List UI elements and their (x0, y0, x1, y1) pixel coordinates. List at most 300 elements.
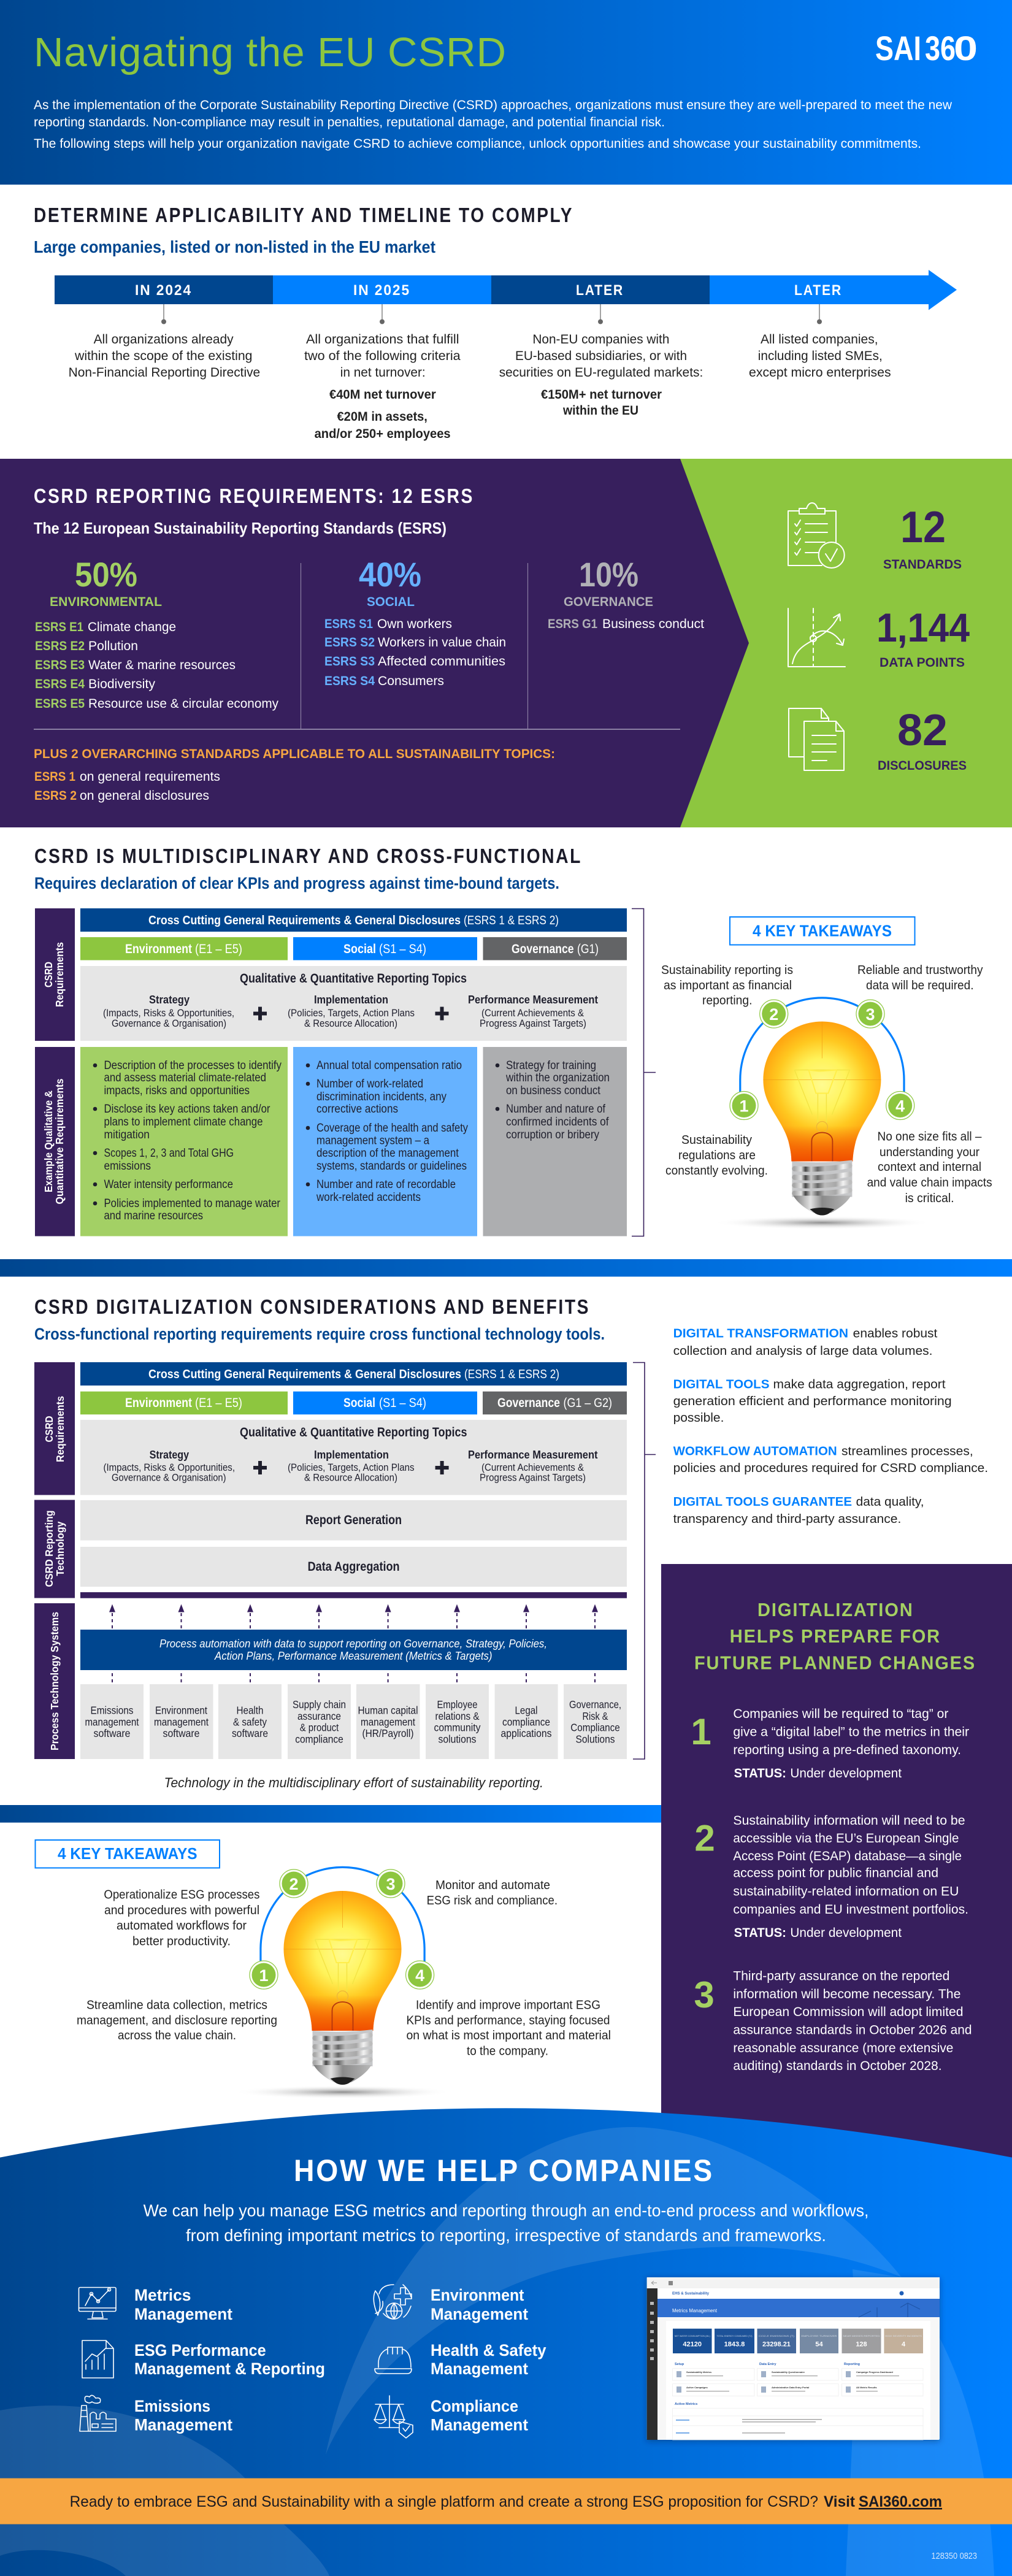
column: social (324, 555, 506, 688)
call to action banner: SAI360.com (859, 2493, 942, 2510)
screenshot card titles: Campaign Progress Dashboard (856, 2371, 893, 2374)
panel: CSRD reporting requirements (0, 459, 1012, 827)
panel: social examples: systems, standards or guidelines (316, 1160, 467, 1173)
tile: emissions software (80, 1684, 144, 1759)
KPI tile headers: HIGH SEVERITY INCIDENTS (885, 2334, 922, 2337)
icon: clipboard checklist (788, 503, 845, 568)
tile: environment software: software (163, 1727, 200, 1739)
panel: governance examples (483, 1047, 627, 1236)
change 3: Third-party assurance on the reported (733, 1969, 949, 1984)
text: digital benefits: data quality, (856, 1495, 924, 1509)
KPI tiles (673, 2329, 923, 2353)
sidebar label: process technology systems (34, 1603, 75, 1759)
column: governance: Business conduct (602, 617, 704, 631)
item: health and safety: Health & Safety (431, 2341, 546, 2359)
change 3 (694, 1969, 972, 2073)
reporting topics panel: & Resource Allocation) (304, 1018, 397, 1029)
column: social: Own workers (377, 617, 452, 631)
reporting topics panel: Qualitative & Quantitative Reporting Topics (240, 1425, 467, 1439)
number 1 (250, 1961, 278, 1989)
dividers (34, 563, 680, 729)
screenshot cards (673, 2369, 923, 2440)
column: environmental: 50% (75, 555, 137, 594)
reporting topics panel: Governance & Organisation) (112, 1018, 226, 1029)
pillar: governance: Governance (497, 1396, 560, 1410)
change 2: companies and EU investment portfolios. (733, 1903, 968, 1917)
stat: 12 standards (883, 503, 962, 572)
column: environmental: Water & marine resources (88, 658, 236, 672)
sidebar label: example requirements (35, 1047, 75, 1236)
change 2: Access Point (ESAP) database—a single (733, 1849, 962, 1863)
overarching standards: on general requirements (80, 770, 220, 784)
sidebar label: CSRD requirements (35, 908, 75, 1041)
tile: legal compliance: applications (500, 1727, 552, 1739)
panel: social examples: corrective actions (316, 1103, 398, 1116)
takeaway 3 text (427, 1879, 558, 1907)
timeline text: in 2024: within the scope of the existing (74, 349, 252, 363)
reporting topics panel: Progress Against Targets) (480, 1018, 586, 1029)
section: key takeaways two (36, 1840, 611, 2099)
tile: human capital: Human capital (358, 1704, 418, 1716)
item: compliance management: Compliance (431, 2397, 518, 2415)
reporting topics panel: (Policies, Targets, Action Plans (288, 1007, 415, 1019)
panel: social examples: management system – a (316, 1135, 429, 1147)
text: digital benefits: WORKFLOW AUTOMATION (673, 1445, 837, 1459)
panel: environment examples: Water intensity performance (104, 1178, 233, 1191)
pillar: social (293, 1392, 477, 1414)
reporting topics panel: Strategy (150, 1449, 189, 1461)
key takeaways box (36, 1840, 220, 1868)
process automation bar (80, 1630, 627, 1670)
KPI tile headers: TOTAL ENERGY CONSUMED (TJ) (716, 2334, 753, 2337)
text: digital benefits: DIGITAL TOOLS GUARANTEE (673, 1495, 852, 1509)
item: compliance management: Management (431, 2415, 528, 2434)
panel: environment examples: impacts, risks and opportunities (104, 1084, 250, 1097)
reporting topics panel: Implementation (314, 1449, 389, 1461)
item: environment management (431, 2286, 528, 2323)
subheading: The 12 European Sustainability Reporting Standards (ESRS) (34, 519, 447, 537)
takeaway 4 text: is critical. (905, 1192, 954, 1205)
tile: health and safety software (218, 1684, 282, 1759)
reporting topics panel: Implementation (314, 994, 388, 1006)
reporting topics panel: Governance & Organisation) (112, 1472, 226, 1483)
text: digital benefits: policies and procedures required for CSRD compliance. (673, 1462, 988, 1475)
panel: social examples (293, 1047, 477, 1236)
logo: SAI360: 36 (925, 29, 956, 67)
takeaway 3 text: ESG risk and compliance. (427, 1894, 558, 1907)
KPI tiles: 4 (902, 2341, 906, 2348)
change 1: give a “digital label” to the metrics in their (733, 1725, 969, 1739)
change 3: assurance standards in October 2026 and (733, 2023, 972, 2037)
intro paragraphs: reporting standards. Non-compliance may result in penalties, reputational damage, and potential financial risk. (34, 115, 665, 129)
number 1 (730, 1092, 758, 1120)
change 1: 1 (691, 1711, 711, 1752)
bracket (632, 909, 656, 1236)
change 2: STATUS: (734, 1926, 786, 1940)
reporting topics panel: Progress Against Targets) (480, 1472, 586, 1483)
intro paragraphs (34, 98, 953, 151)
KPI tiles: 54 (815, 2341, 823, 2348)
stat: 1,144 data points: DATA POINTS (880, 656, 965, 670)
timeline text: later non-EU (499, 332, 703, 418)
takeaway 2 text: Operationalize ESG processes (104, 1888, 259, 1902)
call to action banner (0, 2478, 1012, 2524)
sidebar label: CSRD requirements (34, 1362, 75, 1495)
KPI tiles: 1843.8 (724, 2341, 745, 2348)
tile: emissions software: software (93, 1727, 130, 1739)
panel: environment examples: Scopes 1, 2, 3 and Total GHG (104, 1147, 234, 1160)
screenshot card titles: Sustainability Questionnaire (772, 2371, 805, 2374)
arrows up from process systems (109, 1604, 598, 1684)
number 3: 3 (386, 1875, 396, 1893)
sidebar label: CSRD requirements: Requirements (54, 1396, 66, 1462)
change 2: Under development (790, 1926, 902, 1940)
text: digital benefits: make data aggregation, report (773, 1378, 946, 1392)
panel heading: FUTURE PLANNED CHANGES (694, 1652, 976, 1674)
number 1: 1 (259, 1966, 269, 1985)
change 2: sustainability-related information on EU (733, 1885, 959, 1899)
sidebar label: CSRD requirements: CSRD (43, 1416, 55, 1443)
text: digital benefits: possible. (673, 1411, 724, 1425)
panel: environment examples: mitigation (104, 1129, 150, 1141)
pillar: environment (80, 937, 288, 960)
column: environmental: ENVIRONMENTAL (50, 595, 162, 609)
takeaway 1 text (665, 1133, 768, 1178)
panel: environment examples: and assess material climate-related (104, 1071, 266, 1084)
heading: CSRD DIGITALIZATION CONSIDERATIONS AND BENEFITS (34, 1295, 590, 1318)
screenshot card titles: All Metric Results (856, 2386, 877, 2389)
overarching standards: ESRS 1 (34, 770, 75, 784)
panel: social examples: Annual total compensation ratio (316, 1059, 462, 1072)
column: governance (548, 555, 704, 631)
column: governance: 10% (579, 555, 638, 594)
takeaway 4 text: understanding your (880, 1146, 979, 1159)
takeaway 4 text: No one size fits all – (877, 1130, 982, 1143)
reporting topics panel (80, 1420, 627, 1495)
timeline text: later listed (749, 332, 891, 380)
timeline text: in 2025: two of the following criteria (304, 349, 461, 363)
tile: human capital: (HR/Payroll) (362, 1727, 413, 1739)
overarching standards: PLUS 2 OVERARCHING STANDARDS APPLICABLE TO ALL SUSTAINABILITY TOPICS: (34, 747, 555, 761)
intro text: from defining important metrics to reporting, irrespective of standards and frameworks. (186, 2226, 826, 2245)
icon: safety helmet (375, 2347, 412, 2374)
tile: legal compliance (495, 1684, 558, 1759)
column: social: ESRS S1 (324, 617, 373, 631)
panel: governance examples: Number and nature of (506, 1103, 606, 1116)
change 1: Companies will be required to “tag” or (733, 1707, 948, 1721)
dashboard screenshot (647, 2277, 940, 2440)
intro text (144, 2201, 868, 2245)
number 2: 2 (289, 1875, 299, 1893)
timeline arrow: IN 2025 (353, 282, 410, 299)
timeline text: in 2024 (69, 332, 260, 380)
takeaway 4 text: on what is most important and material (406, 2029, 611, 2042)
tile: employee relations: relations & (435, 1710, 480, 1722)
overarching standards: on general disclosures (80, 789, 209, 803)
column: environmental: Pollution (88, 639, 138, 653)
tile: health and safety software: & safety (233, 1716, 267, 1728)
tile: employee relations: community (434, 1722, 481, 1734)
column: governance: GOVERNANCE (564, 595, 653, 609)
takeaway 1 text (77, 1998, 277, 2042)
timeline text: in 2025: in net turnover: (340, 366, 426, 380)
pillar: social: Social (343, 942, 376, 956)
panel: governance examples: confirmed incidents of (506, 1116, 609, 1129)
timeline arrow: LATER (794, 282, 842, 299)
sidebar label: reporting technology: CSRD Reporting (43, 1510, 55, 1587)
takeaway 2 text: better productivity. (132, 1934, 231, 1948)
key takeaways box: 4 KEY TAKEAWAYS (58, 1844, 197, 1863)
intro paragraphs: As the implementation of the Corporate Sustainability Reporting Directive (CSRD) approaches, organizations must ensure they are well-prepared to meet the new (34, 98, 953, 112)
change 3: reasonable assurance (more extensive (733, 2041, 953, 2055)
timeline text: later listed: except micro enterprises (749, 366, 891, 380)
takeaway 4 text: and value chain impacts (867, 1176, 992, 1190)
cross cutting bar: Cross Cutting General Requirements & General Disclosures (148, 1368, 461, 1381)
column: environmental: ESRS E5 (35, 697, 85, 711)
item: environment management: Management (431, 2305, 528, 2323)
dashboard screenshot: Metrics Management (672, 2307, 718, 2313)
stat: 82 disclosures (878, 706, 967, 773)
takeaway 2 text (104, 1888, 259, 1948)
tile: environment software: Environment (155, 1704, 207, 1716)
logo: SAI360: SAI (875, 29, 921, 67)
title: Navigating the EU CSRD (34, 29, 507, 75)
panel: social examples: work-related accidents (316, 1191, 421, 1204)
icon: environment globe (374, 2285, 412, 2319)
item: health and safety: Management (431, 2359, 528, 2378)
tile: supply chain: assurance (297, 1710, 341, 1722)
overarching standards: ESRS 2 (34, 789, 77, 803)
item: emissions management (134, 2397, 232, 2434)
icon: metrics monitor (79, 2288, 116, 2319)
heading: CSRD IS MULTIDISCIPLINARY AND CROSS-FUNCTIONAL (34, 845, 582, 867)
takeaway 2 text: automated workflows for (117, 1919, 247, 1933)
screenshot card titles: Sustainability Metrics (686, 2371, 712, 2374)
KPI tiles: 23298.21 (762, 2341, 791, 2348)
heading: DETERMINE APPLICABILITY AND TIMELINE TO COMPLY (34, 204, 573, 226)
panel: social examples: Number and rate of recordable (316, 1178, 456, 1191)
timeline text: later listed: including listed SMEs, (758, 349, 883, 363)
number 1: 1 (739, 1097, 749, 1115)
icon: performance document (82, 2340, 113, 2378)
divider band (0, 1259, 1012, 1277)
number 4 (886, 1092, 914, 1120)
change 2: access point for public financial and (733, 1866, 938, 1880)
change 3: 3 (694, 1974, 715, 2015)
number 3 (856, 1000, 884, 1028)
stat: 82 disclosures: DISCLOSURES (878, 759, 967, 773)
column: environmental: ESRS E2 (35, 639, 85, 653)
subheading: Large companies, listed or non-listed in the EU market (34, 237, 435, 256)
process automation bar: Process automation with data to support reporting on Governance, Strategy, Policies, (159, 1638, 547, 1650)
item: emissions management: Management (134, 2415, 232, 2434)
tile: human capital (356, 1684, 420, 1759)
document code: 128350 0823 (931, 2551, 977, 2561)
KPI tile headers: NET WATER CONSUMPTION (ML) (675, 2334, 710, 2337)
call to action banner: Ready to embrace ESG and Sustainability with a single platform and create a strong ESG proposition for CSRD? (70, 2493, 818, 2510)
cross cutting bar (80, 1362, 627, 1386)
icon: factory emissions (80, 2395, 116, 2431)
takeaway 1 text: Streamline data collection, metrics (86, 1998, 267, 2012)
timeline text: later non-EU: within the EU (562, 404, 638, 418)
tile: employee relations (426, 1684, 489, 1759)
tile: legal compliance: compliance (502, 1716, 550, 1728)
panel: social examples: description of the management (316, 1147, 459, 1160)
tile: human capital: management (361, 1716, 415, 1728)
reporting topics panel: & Resource Allocation) (304, 1472, 397, 1483)
panel: data aggregation (80, 1547, 627, 1587)
text: digital benefits: enables robust (853, 1327, 938, 1341)
change 2: Sustainability information will need to be (733, 1814, 965, 1828)
change 3: auditing) standards in October 2028. (733, 2059, 942, 2073)
change 1 (691, 1707, 969, 1781)
pillar: governance (483, 937, 627, 960)
item: ESG performance: Management & Reporting (134, 2359, 325, 2378)
reporting topics panel: (Impacts, Risks & Opportunities, (103, 1462, 235, 1473)
pillar: social: (S1 – S4) (379, 1396, 426, 1410)
takeaway 4 text (867, 1130, 992, 1205)
item: health and safety (431, 2341, 546, 2378)
change 1: reporting using a pre-defined taxonomy. (733, 1743, 961, 1757)
pillar: governance (483, 1392, 627, 1414)
takeaway 4 text: Identify and improve important ESG (416, 1998, 600, 2012)
panel: report generation: Report Generation (305, 1513, 402, 1527)
takeaway 3 text (857, 964, 983, 992)
pillar: social (293, 937, 477, 960)
timeline text: later non-EU: Non-EU companies with (532, 332, 669, 347)
panel: digitalization helps prepare (661, 1564, 1012, 2159)
tile: emissions software: management (85, 1716, 139, 1728)
timeline text: in 2025: All organizations that fulfill (306, 332, 459, 347)
panel: how we help companies (0, 2108, 1012, 2576)
panel: social examples: discrimination incidents, any (316, 1091, 447, 1103)
panel: governance examples: on business conduct (506, 1084, 601, 1097)
tile: health and safety software: Health (237, 1704, 264, 1716)
timeline text: in 2024: All organizations already (94, 332, 234, 347)
screenshot section labels: Setup (675, 2363, 684, 2366)
item: environment management: Environment (431, 2286, 524, 2304)
screenshot section labels: Data Entry (759, 2363, 776, 2366)
panel: environment examples: and marine resources (104, 1209, 203, 1222)
KPI tiles: 42120 (683, 2341, 702, 2348)
cross cutting bar: (ESRS 1 & ESRS 2) (464, 1368, 559, 1381)
item: emissions management: Emissions (134, 2397, 210, 2415)
stat: 1,144 data points: 1,144 (876, 605, 970, 650)
column: environmental: ESRS E3 (35, 658, 85, 672)
column: social: ESRS S4 (324, 674, 375, 688)
overarching standards (34, 747, 555, 803)
screenshot card titles (686, 2371, 893, 2389)
item: metrics management: Management (134, 2305, 232, 2323)
change 1: Under development (790, 1766, 902, 1781)
screenshot card titles: Active Campaigns (686, 2386, 708, 2389)
call to action banner: Visit (824, 2493, 856, 2510)
icon: compliance scale (374, 2396, 413, 2438)
text: digital benefits: generation efficient and performance monitoring (673, 1395, 952, 1408)
sidebar label: reporting technology: Technology (54, 1521, 66, 1576)
KPI tile headers (675, 2334, 922, 2337)
reporting topics panel: (Impacts, Risks & Opportunities, (103, 1007, 234, 1019)
cross cutting bar: (ESRS 1 & ESRS 2) (464, 914, 559, 927)
reporting topics panel: (Policies, Targets, Action Plans (288, 1462, 415, 1473)
bracket (633, 1363, 656, 1759)
takeaway 1 text: management, and disclosure reporting (77, 2014, 277, 2028)
section: applicability and timeline (34, 204, 957, 441)
pillar: environment (80, 1392, 288, 1414)
sidebar label: example requirements: Example Qualitative & (42, 1091, 55, 1192)
item: compliance management (431, 2397, 528, 2434)
column: social: Workers in value chain (378, 635, 506, 650)
column: environmental: Biodiversity (88, 677, 156, 691)
takeaway 4 text: KPIs and performance, staying focused (406, 2014, 610, 2028)
screenshot card titles: Administrative Data Entry Portal (772, 2386, 809, 2389)
icon: line chart (788, 608, 845, 667)
change 1: STATUS: (734, 1766, 786, 1781)
panel: governance examples: Strategy for training (506, 1059, 596, 1072)
column: social: ESRS S3 (324, 654, 375, 669)
takeaway 2 text (661, 964, 793, 1007)
text: digital benefits (673, 1327, 988, 1526)
takeaway 2 text: and procedures with powerful (104, 1904, 259, 1917)
tile: emissions software: Emissions (91, 1704, 134, 1716)
number 2 (280, 1869, 308, 1898)
number 2: 2 (769, 1005, 778, 1024)
panel: environment examples: emissions (104, 1160, 151, 1173)
tile: supply chain: & product (300, 1722, 339, 1734)
column: social: ESRS S2 (324, 635, 375, 650)
tile: legal compliance: Legal (515, 1704, 537, 1716)
column: social: 40% (359, 555, 421, 594)
panel heading: HELPS PREPARE FOR (730, 1625, 941, 1647)
tile: governance risk compliance: Governance, (569, 1698, 621, 1711)
sidebar label: CSRD requirements: CSRD (42, 962, 55, 987)
subheading: Requires declaration of clear KPIs and progress against time-bound targets. (34, 874, 559, 892)
tile: environment software: management (154, 1716, 209, 1728)
reporting topics panel: Performance Measurement (468, 1449, 598, 1461)
intro paragraphs: The following steps will help your organization navigate CSRD to achieve compliance, unlock opportunities and showcase your sustainability commitments. (34, 137, 921, 151)
panel: environment examples: Disclose its key actions taken and/or (104, 1103, 270, 1116)
reporting topics panel: Performance Measurement (468, 994, 598, 1006)
stat: 12 standards: 12 (900, 503, 946, 552)
KPI tile headers: EMPLOYEE TURNOVER (801, 2334, 837, 2337)
sidebar label: reporting technology (34, 1500, 75, 1598)
KPI tile headers: NEAR MISSES REPORTED (843, 2334, 880, 2337)
stat: 12 standards: STANDARDS (883, 558, 962, 572)
section: digitalization considerations (34, 1295, 988, 1790)
sidebar label: CSRD requirements: Requirements (53, 942, 66, 1007)
takeaway 4 text (406, 1998, 611, 2058)
column: environmental: ESRS E4 (35, 677, 85, 691)
number 3: 3 (865, 1005, 875, 1024)
item: ESG performance (134, 2341, 325, 2378)
pillar: governance: (G1 – G2) (563, 1396, 612, 1410)
pillar: environment: (E1 – E5) (195, 1396, 242, 1410)
panel: governance examples: corruption or bribery (506, 1129, 599, 1141)
column: environmental: Climate change (88, 620, 176, 634)
pillar: governance: (G1) (577, 942, 599, 956)
panel: environment examples: plans to implement climate change (104, 1116, 263, 1129)
key takeaways box (730, 917, 915, 945)
takeaway 1 text: constantly evolving. (665, 1164, 768, 1178)
takeaway 2 text: as important as financial (664, 979, 792, 992)
pillar: social: (S1 – S4) (379, 942, 426, 956)
timeline arrow (55, 270, 957, 324)
text: digital benefits: DIGITAL TOOLS (673, 1378, 769, 1392)
number 4: 4 (895, 1097, 905, 1115)
number 4 (406, 1961, 434, 1989)
screenshot section labels: Active Metrics (675, 2402, 697, 2406)
subheading: Cross-functional reporting requirements require cross functional technology tools. (34, 1325, 605, 1343)
